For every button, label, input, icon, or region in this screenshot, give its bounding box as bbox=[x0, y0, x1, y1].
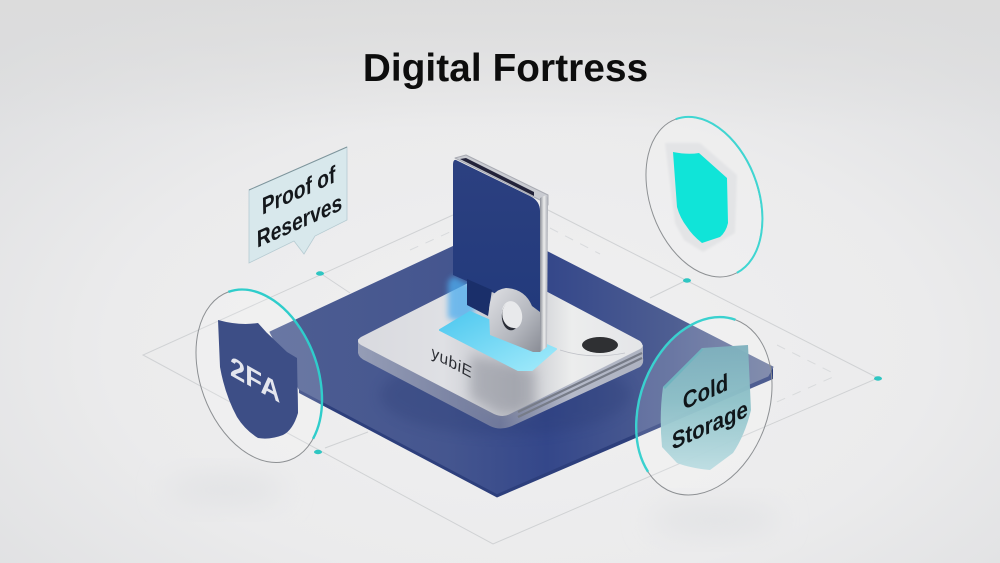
proof of reserves callout: Proof of bbox=[262, 160, 336, 220]
shield backing bbox=[665, 143, 737, 252]
key metal side strip bbox=[540, 195, 548, 352]
badge: 2FA shield: 2FA bbox=[230, 351, 280, 410]
glowing cyan slot bbox=[440, 276, 556, 370]
fingerprint sensor button bbox=[582, 337, 618, 353]
key dark tab bbox=[467, 279, 492, 316]
proof of reserves callout: Reserves bbox=[257, 188, 342, 253]
connector dots bbox=[314, 271, 882, 454]
proof of reserves callout bbox=[249, 147, 347, 263]
key frame top edge bbox=[455, 155, 548, 205]
glass ring bbox=[173, 272, 345, 480]
badge: cold storage shield bbox=[612, 298, 796, 514]
hardware security key device bbox=[358, 155, 643, 435]
title: Digital Fortress bbox=[363, 47, 648, 90]
shield face bbox=[673, 152, 728, 243]
glass ring bbox=[612, 298, 796, 514]
key metal ring with hole bbox=[489, 288, 540, 352]
navy base slab bbox=[270, 226, 773, 498]
badge: cold storage shield: Storage bbox=[672, 394, 748, 455]
device base plate bbox=[358, 269, 643, 435]
wireframe base grid bbox=[143, 210, 878, 544]
brand label: yubiE bbox=[431, 343, 473, 382]
shield body bbox=[218, 320, 298, 439]
badge: 2FA shield bbox=[173, 272, 345, 480]
key navy card bbox=[453, 160, 540, 313]
shield body bbox=[661, 345, 751, 470]
badge: cyan shield bbox=[625, 101, 783, 293]
glass ring bbox=[625, 101, 783, 293]
badge: cold storage shield: Cold bbox=[683, 368, 728, 415]
